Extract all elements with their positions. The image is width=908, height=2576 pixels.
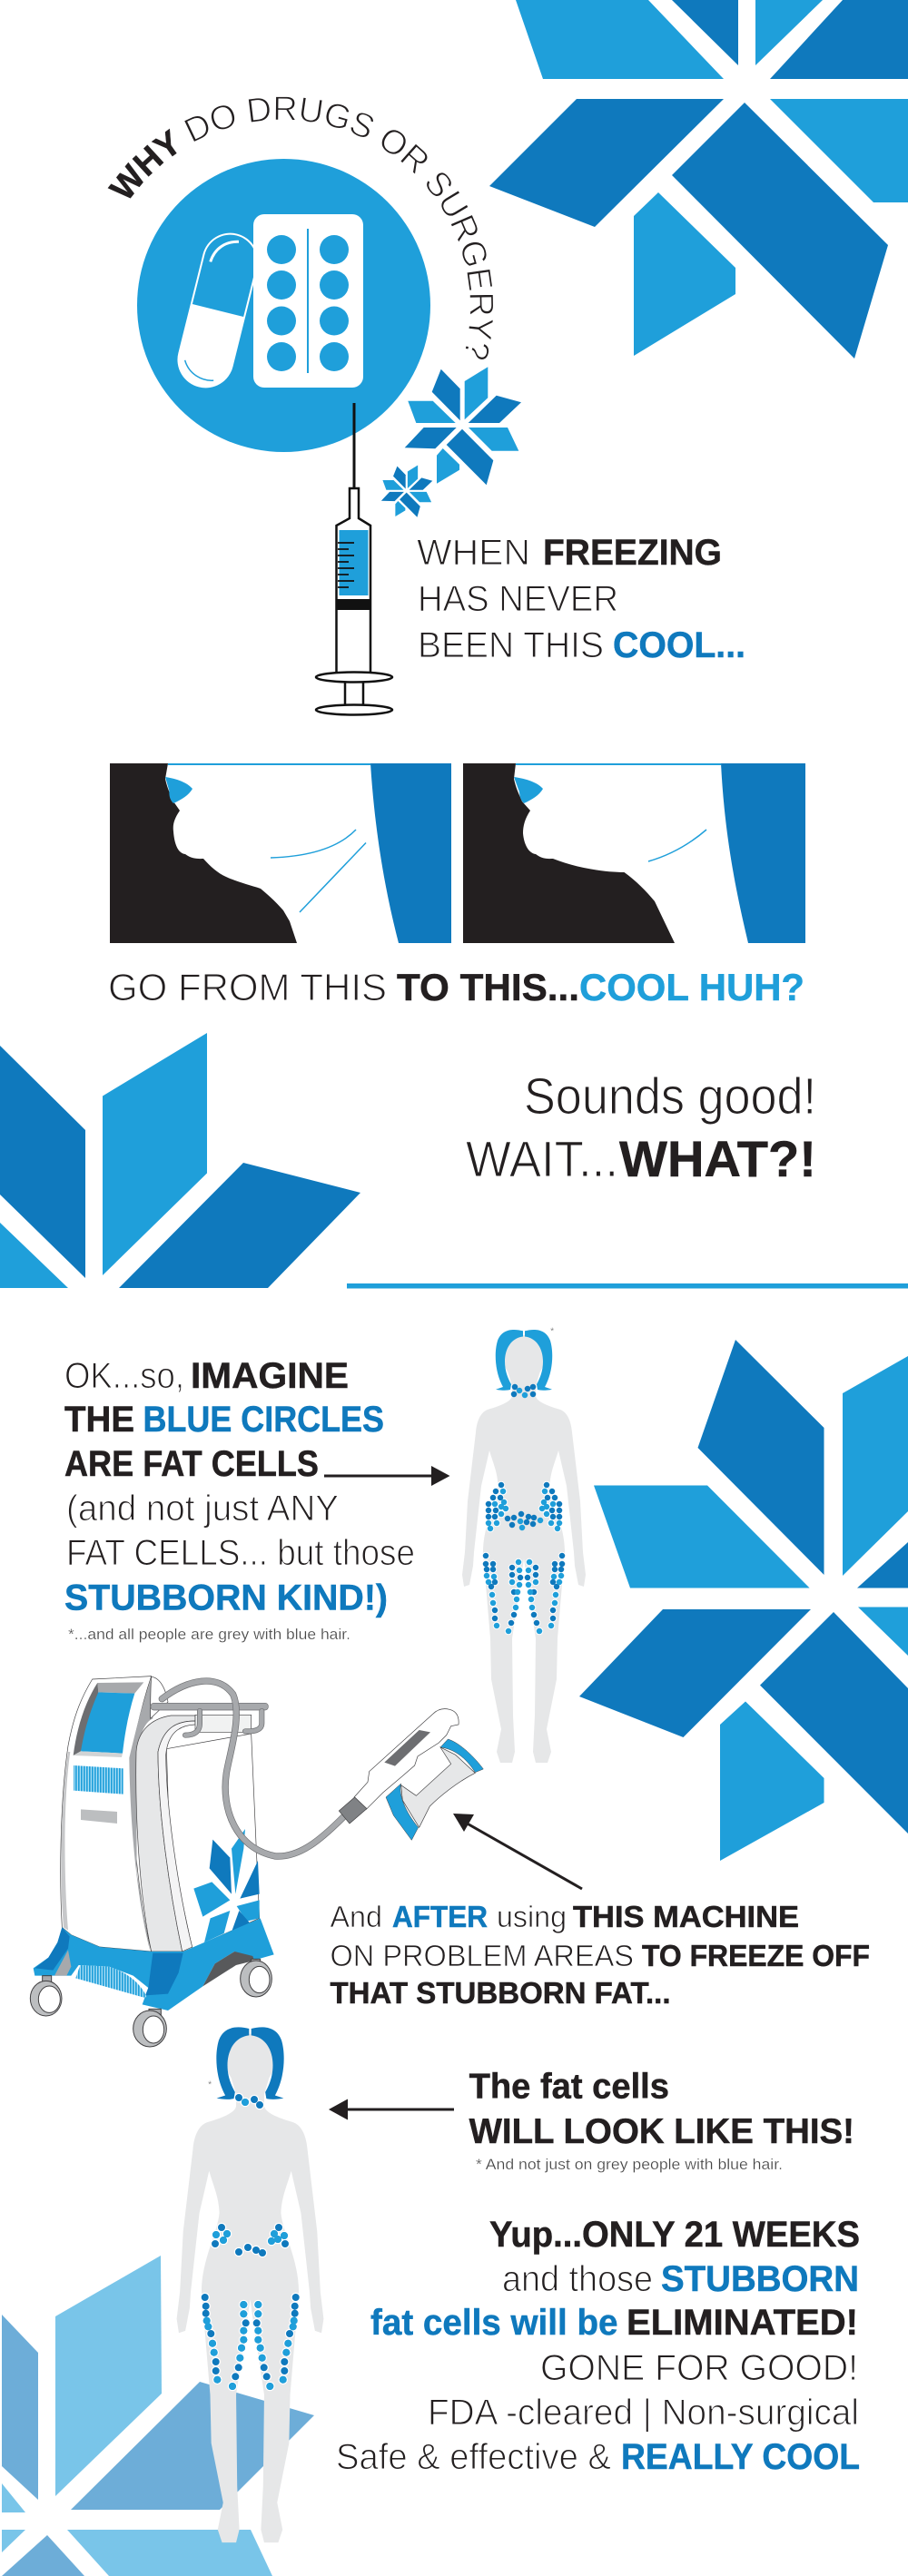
asterisk: * — [208, 2079, 212, 2090]
text block: will look like this: WILL LOOK LIKE THIS! — [469, 2112, 854, 2151]
text block: only 21 weeks: Yup...ONLY 21 WEEKS — [489, 2215, 860, 2255]
snowflake: medium — [405, 367, 521, 485]
figure: body with few fat cells — [177, 2027, 323, 2542]
hair — [496, 1330, 552, 1391]
machine applicator handle — [339, 1709, 483, 1840]
icon: syringe — [316, 403, 392, 715]
snowflake: top right — [489, 0, 908, 359]
heading: sounds good: WHAT?! — [619, 1130, 816, 1187]
text block: imagine blue circles: ARE FAT CELLS — [64, 1444, 319, 1484]
machine wheels — [30, 1959, 271, 2047]
text block: after using this machine: AFTER — [392, 1900, 488, 1933]
text block: after using this machine: THIS MACHINE — [573, 1900, 799, 1933]
caption: go from this to this: GO FROM THIS — [108, 966, 387, 1008]
text block: after using this machine: And — [331, 1900, 382, 1933]
panel: before profile — [110, 763, 451, 943]
text block: imagine blue circles: (and not just ANY — [66, 1489, 339, 1529]
snowflake: right — [579, 1340, 908, 1861]
machine ear — [151, 1676, 168, 1718]
text block: imagine blue circles: FAT CELLS... but those — [66, 1533, 415, 1573]
tagline: when freezing — [417, 533, 745, 665]
text block: after using this machine: ON PROBLEM AREAS — [331, 1939, 634, 1972]
icon: capsule — [172, 227, 264, 394]
caption: go from this to this — [108, 966, 804, 1008]
icon: pills circle — [137, 159, 430, 452]
arrow: to applicator — [453, 1814, 582, 1889]
fat cells — [205, 2098, 296, 2386]
tagline: when freezing: WHEN — [417, 533, 530, 573]
snowflake: middle left — [0, 1033, 360, 1288]
curved title: WHY DO DRUGS OR SURGERY? — [107, 96, 493, 359]
machine cable — [162, 1681, 343, 1856]
arrow: to figure — [324, 1466, 450, 1486]
text block: only 21 weeks: ELIMINATED! — [627, 2303, 858, 2343]
tagline: when freezing: COOL... — [613, 625, 745, 665]
text block: imagine blue circles: OK...so, — [64, 1356, 184, 1396]
divider line — [347, 1283, 908, 1289]
tagline: when freezing: FREEZING — [543, 533, 722, 573]
text block: only 21 weeks: Safe & effective & — [336, 2437, 611, 2477]
caption: go from this to this: TO THIS... — [397, 966, 579, 1008]
panel: after profile — [463, 763, 805, 943]
fat cells — [486, 1387, 562, 1631]
machine back panel — [166, 1734, 260, 1949]
text block: after using this machine — [331, 1900, 870, 2010]
text block: imagine blue circles: IMAGINE — [191, 1356, 349, 1396]
text block: imagine blue circles: THE — [64, 1400, 134, 1440]
tagline: when freezing: HAS NEVER — [418, 579, 618, 619]
tagline: when freezing: BEEN THIS — [418, 625, 604, 665]
text block: only 21 weeks: STUBBORN — [661, 2259, 859, 2299]
text block: will look like this: * And not just on grey people with blue hair. — [476, 2156, 783, 2173]
machine vent — [75, 1965, 147, 1998]
snowflake: small — [381, 466, 432, 517]
arrow: to second figure — [329, 2099, 454, 2120]
icon: blister pack — [253, 214, 363, 388]
hair — [216, 2027, 284, 2099]
text block: only 21 weeks: REALLY COOL — [621, 2437, 860, 2477]
heading: sounds good — [466, 1067, 816, 1187]
machine base — [34, 1918, 274, 2011]
figure: body with many fat cells — [462, 1326, 586, 1763]
text block: only 21 weeks: FDA -cleared | Non-surgical — [428, 2393, 859, 2433]
text block: imagine blue circles: *...and all people are grey with blue hair. — [68, 1626, 350, 1643]
text block: only 21 weeks: and those — [502, 2259, 653, 2299]
text block: imagine blue circles: BLUE CIRCLES — [143, 1400, 384, 1440]
machine barcode — [74, 1765, 123, 1794]
machine screen — [74, 1682, 143, 1757]
text block: after using this machine: TO FREEZE OFF — [642, 1939, 870, 1972]
text block: only 21 weeks: GONE FOR GOOD! — [540, 2348, 858, 2388]
text block: only 21 weeks: fat cells will be — [370, 2303, 617, 2343]
text block: imagine blue circles: STUBBORN KIND!) — [64, 1578, 388, 1617]
heading: sounds good: WAIT... — [466, 1130, 618, 1187]
machine rail — [151, 1703, 268, 1735]
asterisk: * — [550, 1326, 555, 1337]
text block: will look like this: The fat cells — [469, 2067, 669, 2106]
caption: go from this to this: COOL HUH? — [579, 966, 804, 1008]
snowflake: bottom pale — [2, 2256, 314, 2576]
machine: cooling device — [30, 1676, 483, 2047]
heading: sounds good: Sounds good! — [524, 1067, 816, 1126]
machine column — [136, 1716, 195, 1952]
machine star decal — [193, 1829, 260, 1942]
machine label — [81, 1809, 117, 1824]
text block: will look like this — [469, 2067, 854, 2173]
machine front body — [61, 1676, 152, 1952]
text block: imagine blue circles — [64, 1356, 415, 1643]
text block: after using this machine: using — [497, 1900, 567, 1933]
text block: only 21 weeks — [336, 2215, 860, 2477]
text block: after using this machine: THAT STUBBORN FAT... — [331, 1976, 670, 2010]
